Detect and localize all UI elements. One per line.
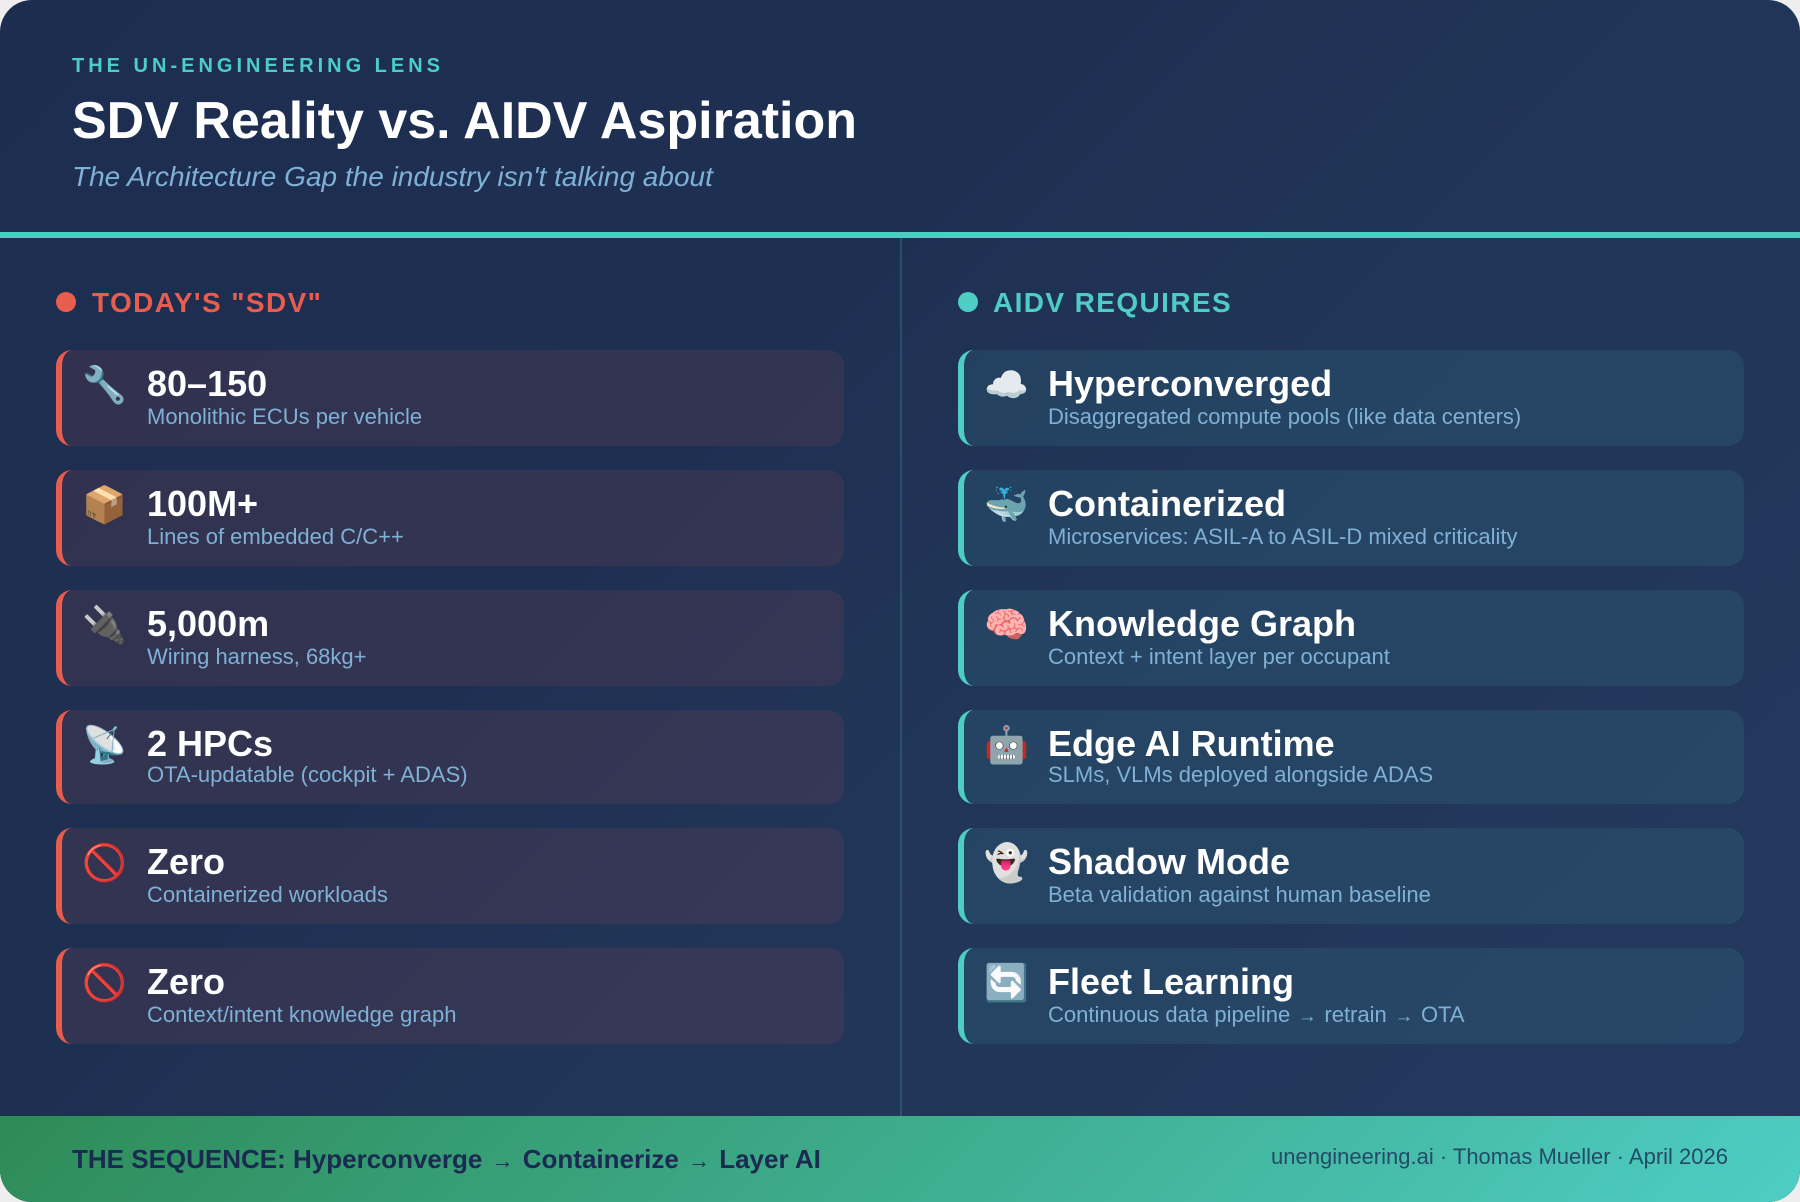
icon: prohibited: 🚫 [82,842,127,884]
value: Containerized [1048,483,1286,524]
footer [0,1116,1800,1202]
description: Wiring harness, 68kg+ [147,644,366,669]
value: Shadow Mode [1048,841,1290,882]
icon: plug: 🔌 [82,604,127,646]
card: lines of code [56,470,844,566]
card: zero knowledge graph [56,948,844,1044]
value: Knowledge Graph [1048,603,1356,644]
description: Containerized workloads [147,882,388,907]
card: shadow mode [958,828,1744,924]
description: Microservices: ASIL-A to ASIL-D mixed criticality [1048,524,1517,549]
card: wiring [56,590,844,686]
teal dot [958,292,978,312]
icon: cloud: ☁️ [984,364,1029,406]
value: Zero [147,961,225,1002]
heading: today's SDV [56,287,322,318]
icon: ghost: 👻 [984,842,1029,884]
description: Context/intent knowledge graph [147,1002,456,1027]
value: Edge AI Runtime [1048,723,1335,764]
value: 2 HPCs [147,723,273,764]
description: Monolithic ECUs per vehicle [147,404,422,429]
icon: repeat arrows: 🔄 [984,962,1029,1004]
icon: brain: 🧠 [984,604,1029,646]
icon: wrench: 🔧 [82,364,127,406]
card: HPCs [56,710,844,804]
icon: prohibited: 🚫 [82,962,127,1004]
card: fleet learning [958,948,1744,1044]
icon: satellite dish: 📡 [82,724,127,766]
description: OTA-updatable (cockpit + ADAS) [147,762,468,787]
red dot [56,292,76,312]
card: knowledge graph [958,590,1744,686]
card: ECUs [56,350,844,446]
sequence callout: THE SEQUENCE: Hyperconverge → Containerize → Layer AI [72,1144,821,1174]
description: Context + intent layer per occupant [1048,644,1390,669]
value: 100M+ [147,483,258,524]
heading: AIDV requires [958,287,1232,318]
value: Hyperconverged [1048,363,1332,404]
heading text: TODAY'S "SDV" [92,287,322,318]
panel: AIDV requires [900,238,1800,1116]
card: edge AI runtime [958,710,1744,804]
description: Continuous data pipeline → retrain → OTA [1048,1002,1465,1027]
icon: whale: 🐳 [984,484,1029,526]
title: SDV Reality vs. AIDV Aspiration [72,92,857,150]
heading text: AIDV REQUIRES [993,287,1232,318]
attribution: unengineering.ai · Thomas Mueller · April 2026 [1271,1144,1728,1169]
value: 5,000m [147,603,269,644]
card: zero containers [56,828,844,924]
subtitle: The Architecture Gap the industry isn't talking about [72,161,713,192]
value: Zero [147,841,225,882]
description: Disaggregated compute pools (like data centers) [1048,404,1521,429]
panel: today's SDV [56,287,322,318]
card: hyperconverged [958,350,1744,446]
card: containerized [958,470,1744,566]
description: SLMs, VLMs deployed alongside ADAS [1048,762,1433,787]
eyebrow label: THE UN-ENGINEERING LENS [72,55,444,77]
value: Fleet Learning [1048,961,1294,1002]
icon: robot: 🤖 [984,724,1029,766]
value: 80–150 [147,363,267,404]
header [0,0,1800,238]
description: Beta validation against human baseline [1048,882,1431,907]
icon: package: 📦 [82,484,127,526]
description: Lines of embedded C/C++ [147,524,404,549]
